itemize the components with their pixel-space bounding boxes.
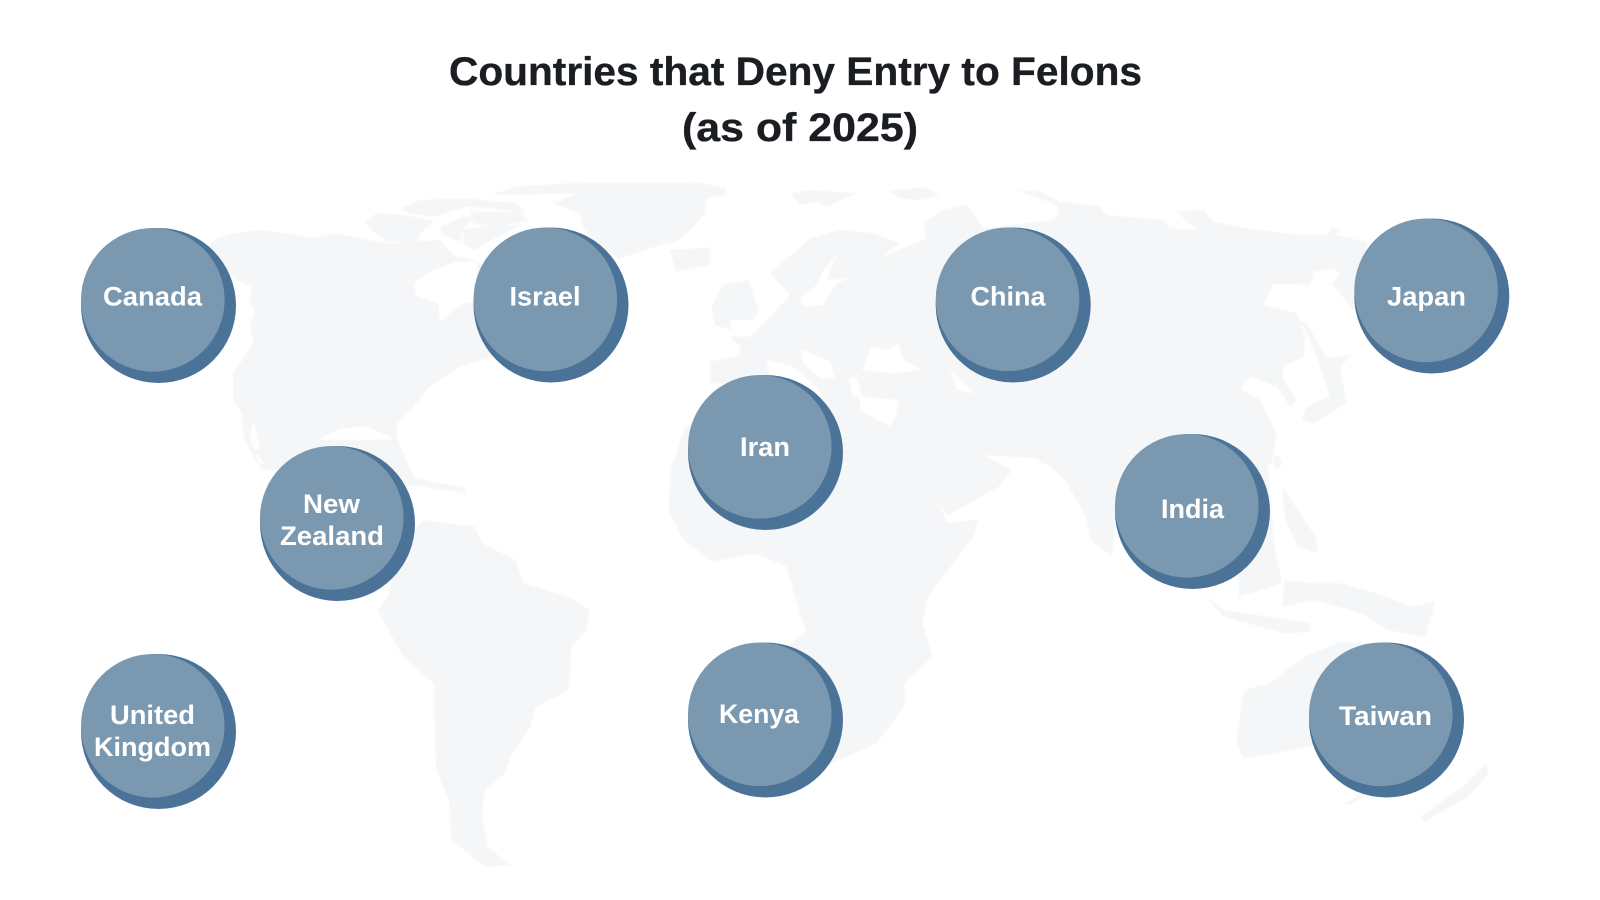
map: Central and South America, Africa: [253, 403, 979, 867]
title: [449, 50, 1142, 150]
circle: China: China: [970, 282, 1046, 312]
title: (as of 2025): [682, 106, 918, 150]
circle: Kenya: [688, 642, 843, 798]
circle: Taiwan: Taiwan: [1339, 701, 1432, 731]
circle: United Kingdom: [81, 654, 236, 809]
title: Countries that Deny Entry to Felons: [449, 50, 1142, 94]
circle: Canada: Canada: [103, 282, 203, 312]
circle: New Zealand: New: [303, 489, 361, 519]
circle: Canada: [81, 228, 236, 383]
circle: China: [936, 227, 1091, 382]
circle: New Zealand: Zealand: [280, 521, 384, 551]
map: North America and Arctic: [203, 183, 727, 470]
map: Japan islands: [1273, 320, 1352, 469]
circle: Israel: Israel: [510, 282, 580, 312]
circle: India: [1115, 434, 1270, 589]
circle: Israel: [474, 227, 628, 382]
map: South Asia, Southeast Asia, Oceania: [897, 430, 1489, 822]
circle: Japan: [1354, 218, 1509, 374]
circle: Japan: Japan: [1387, 282, 1466, 312]
circle: Taiwan: [1309, 642, 1464, 798]
circle: United Kingdom: Kingdom: [94, 732, 211, 762]
circle: Iran: Iran: [740, 432, 790, 462]
circle: Kenya: Kenya: [719, 699, 800, 729]
background world map: [203, 183, 1489, 867]
circle: United Kingdom: United: [110, 700, 195, 730]
map: Eurasia north: [669, 187, 1367, 470]
circle: New Zealand: [260, 446, 415, 601]
circle: Iran: [688, 375, 843, 530]
circle: India: India: [1161, 494, 1225, 524]
